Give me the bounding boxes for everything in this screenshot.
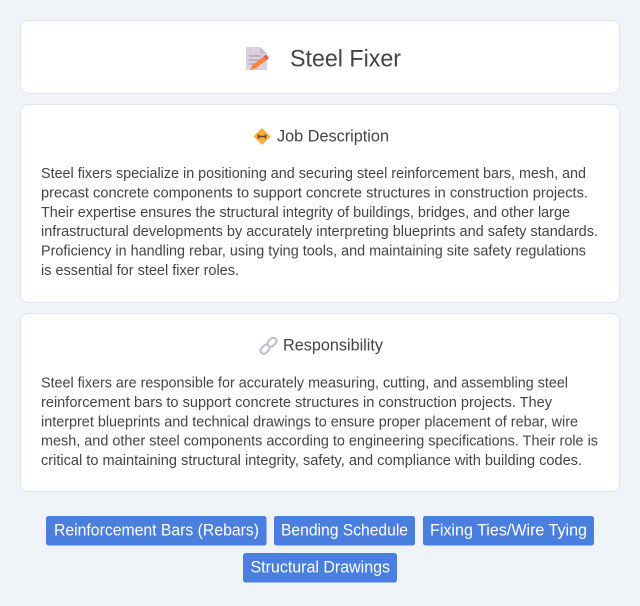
tag: structural drawings — [243, 553, 397, 582]
heading: job description: Job Description — [277, 128, 389, 146]
job description text: Proficiency in handling rebar, using tying tools, and maintaining site safety regulations — [41, 244, 586, 260]
tag: bending schedule — [274, 516, 415, 546]
icon: construction sign — [254, 128, 270, 145]
icon: document with pencil — [246, 47, 269, 70]
tag: reinforcement bars: Reinforcement Bars (Rebars) — [54, 520, 259, 540]
icon: chain link — [259, 336, 278, 355]
job description text: Their expertise ensures the structural integrity of buildings, bridges, and other large — [41, 205, 570, 221]
tag: fixing ties: Fixing Ties/Wire Tying — [430, 520, 587, 540]
panel: title card — [20, 20, 620, 94]
job description text: is essential for steel fixer roles. — [41, 263, 239, 279]
tag: reinforcement bars — [46, 516, 266, 546]
job description text — [41, 166, 598, 279]
title: Steel Fixer — [290, 46, 401, 72]
tag: fixing ties — [423, 516, 594, 546]
job description text: Steel fixers specialize in positioning and securing steel reinforcement bars, mesh, and — [41, 166, 586, 182]
responsibility text: interpret blueprints and technical drawings to ensure proper placement of rebar, wire — [41, 414, 578, 430]
responsibility text: mesh, and other steel components according to engineering specifications. Their role is — [41, 434, 598, 450]
responsibility text: reinforcement bars to support concrete structures in construction projects. They — [41, 395, 553, 411]
panel: job description — [20, 104, 620, 302]
job description text: precast concrete components to support concrete structures in construction projects. — [41, 186, 588, 202]
panel: responsibility — [20, 314, 620, 492]
tag: bending schedule: Bending Schedule — [281, 520, 408, 540]
tags — [46, 516, 594, 582]
tag: structural drawings: Structural Drawings — [250, 558, 390, 576]
responsibility text: Steel fixers are responsible for accurately measuring, cutting, and assembling steel — [41, 376, 568, 392]
heading: responsibility: Responsibility — [283, 336, 384, 354]
responsibility text — [41, 376, 598, 469]
responsibility text: critical to maintaining structural integrity, safety, and compliance with building codes. — [41, 453, 582, 469]
job description text: infrastructural developments by accurately interpreting blueprints and safety standards. — [41, 224, 598, 240]
